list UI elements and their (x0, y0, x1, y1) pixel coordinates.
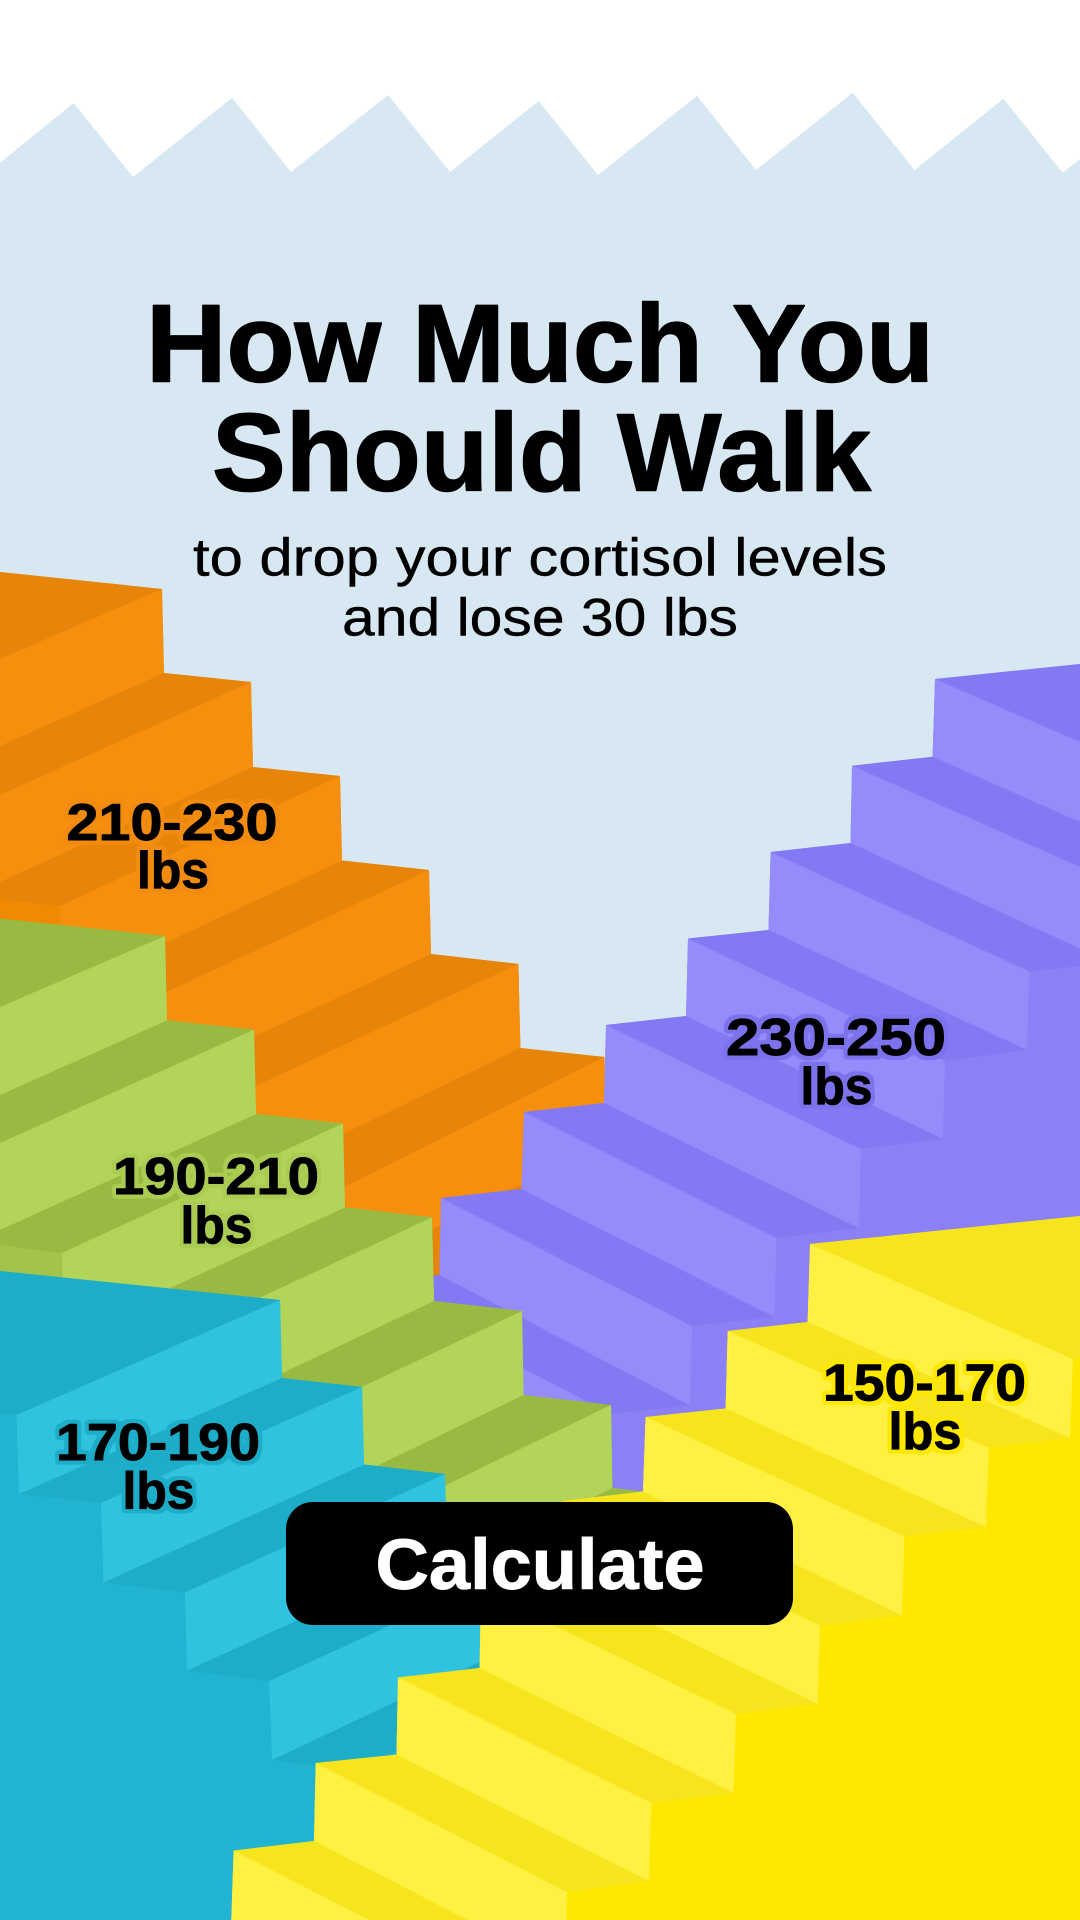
subtitle: to drop your cortisol levels (193, 528, 887, 588)
subtitle (193, 528, 887, 648)
label: 190-210 lbs: 190-210 (113, 1148, 319, 1206)
label: 210-230 lbs: 210-230 (66, 794, 278, 852)
title (146, 283, 934, 515)
label: 170-190 lbs: 170-190 (56, 1414, 260, 1472)
label: 210-230 lbs: lbs (137, 842, 209, 900)
staircase: orange (0, 572, 700, 1400)
label: 150-170 lbs (823, 1355, 1026, 1461)
label: 210-230 lbs (66, 794, 278, 900)
staircase: blue (0, 1271, 612, 1920)
label: 170-190 lbs (56, 1414, 260, 1520)
label: 150-170 lbs: 150-170 (823, 1355, 1026, 1413)
label: 230-250 lbs (726, 1009, 946, 1116)
label: 230-250 lbs: 230-250 (726, 1009, 946, 1067)
title: How Much You (146, 283, 934, 406)
staircase: yellow (231, 1216, 1080, 1920)
label: 190-210 lbs (113, 1148, 319, 1255)
label: 230-250 lbs: lbs (800, 1058, 872, 1116)
label: 190-210 lbs: lbs (180, 1197, 252, 1255)
staircase: purple (357, 664, 1080, 1520)
label: 150-170 lbs: lbs (888, 1403, 962, 1461)
title: Should Walk (212, 392, 872, 515)
button: Calculate (286, 1502, 793, 1625)
label: 170-190 lbs: lbs (122, 1462, 194, 1520)
staircase: green (0, 919, 720, 1700)
subtitle: and lose 30 lbs (342, 588, 738, 648)
button: Calculate: Calculate (376, 1526, 704, 1605)
